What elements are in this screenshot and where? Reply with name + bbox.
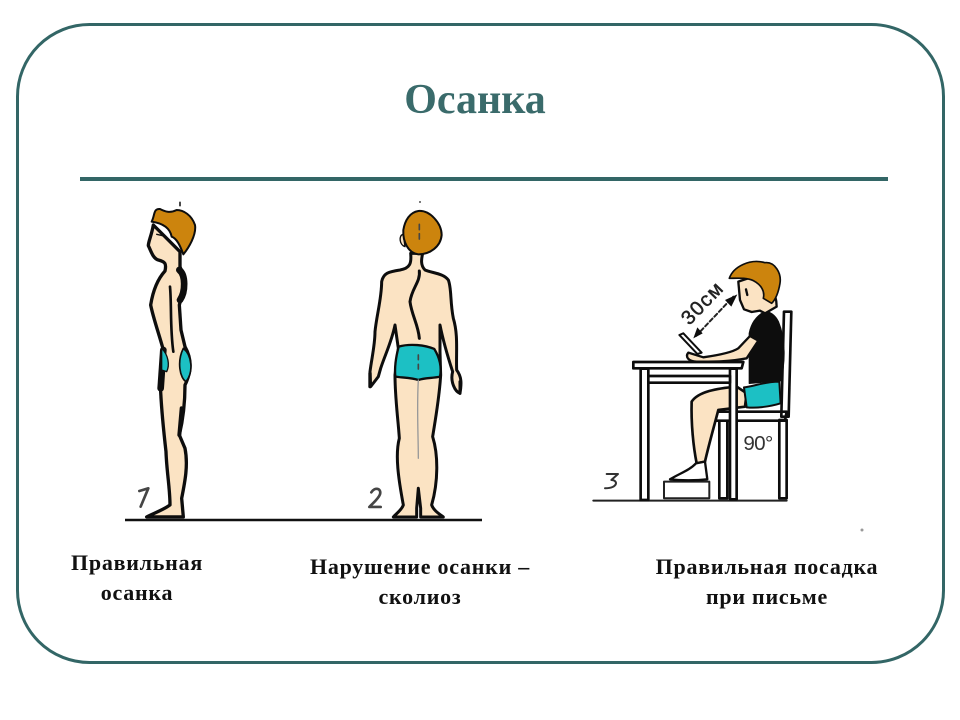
torso (749, 312, 784, 383)
hair (152, 209, 195, 254)
figure 3: correct sitting at a desk (593, 262, 791, 501)
title divider (80, 177, 888, 181)
floor line under standing figures (125, 519, 482, 521)
figure 2: scoliosis (369, 202, 461, 517)
chair (714, 312, 791, 498)
caption 3 (656, 554, 878, 608)
caption 2: Нарушение осанки – (310, 554, 530, 579)
caption 1 (71, 550, 203, 604)
caption 2 (310, 554, 530, 608)
distance arrow (696, 297, 733, 336)
ear (400, 234, 405, 247)
angle label: 90° (743, 432, 773, 455)
number 1 (139, 488, 148, 507)
footstool (664, 482, 709, 498)
caption 3: при письме (706, 584, 828, 608)
shoe (670, 462, 707, 480)
shorts (744, 382, 781, 408)
book (679, 333, 702, 354)
leg (692, 387, 747, 463)
speck (860, 528, 864, 532)
caption 2: сколиоз (378, 584, 461, 608)
figure 1: correct posture (139, 202, 195, 517)
title: Осанка (404, 77, 546, 123)
head and neck (738, 277, 777, 313)
caption 3: Правильная посадка (656, 554, 878, 579)
distance label: 30см (677, 278, 728, 329)
caption 1: осанка (101, 580, 173, 604)
hair (729, 262, 780, 303)
number 3 (605, 474, 618, 488)
number 2 (369, 489, 381, 507)
arm (687, 336, 758, 362)
hair (403, 211, 442, 254)
desk (633, 362, 743, 500)
caption 1: Правильная (71, 550, 203, 575)
floor (593, 498, 787, 504)
